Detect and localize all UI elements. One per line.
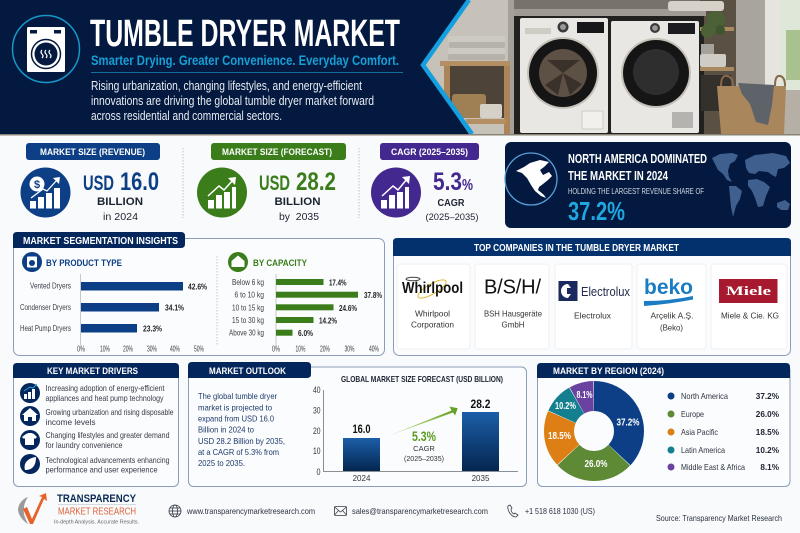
header description: innovations are driving the global tumble dryer market forward (91, 94, 374, 108)
world map (712, 153, 790, 217)
chart: by product type (20, 252, 208, 354)
panel: top companies: TOP COMPANIES IN THE TUMBLE DRYER MARKET (474, 243, 679, 254)
chart: by capacity: Below 6 kg (232, 278, 264, 287)
panel: market segmentation insights (13, 232, 384, 356)
stat: market size forecast: USD (259, 172, 290, 195)
chart: by capacity: 24.6% (339, 304, 358, 313)
chart: by capacity (228, 252, 383, 354)
stat: CAGR: CAGR (438, 198, 465, 209)
footer: email: sales@transparencymarketresearch.com (352, 506, 488, 516)
stat: CAGR: (2025–2035) (426, 212, 478, 222)
title: TUMBLE DRYER MARKET (90, 13, 400, 55)
legend: regions: 37.2% (756, 392, 780, 401)
company: Whirlpool (397, 264, 470, 349)
company: BSH: B/S/H/ (484, 276, 541, 298)
driver: energy efficiency: appliances and heat pump technology (46, 394, 164, 403)
chart: by capacity: 37.8% (364, 291, 383, 300)
panel: top companies (393, 238, 791, 356)
callout: North America dominated: THE MARKET IN 2024 (568, 168, 669, 183)
panel: market by region (537, 363, 790, 486)
chart: by capacity: 10% (296, 344, 306, 354)
company: Electrolux (555, 264, 632, 349)
stat: market size forecast: BILLION (274, 196, 321, 208)
company: Beko: beko (644, 276, 693, 299)
panel: market segmentation insights: MARKET SEGMENTATION INSIGHTS (23, 236, 178, 247)
company: Miele (711, 264, 787, 349)
legend: regions: 8.1% (760, 463, 780, 472)
outlook text: 2025 to 2035. (198, 458, 245, 468)
chart: by capacity: 40% (369, 344, 379, 354)
chart: by capacity: 14.2% (319, 316, 338, 326)
chart: donut by region: 18.5% (548, 430, 572, 442)
chart: global market size forecast: 5.3% (412, 428, 436, 444)
footer logo: Transparency Market Research (18, 493, 139, 526)
callout: North America dominated (505, 142, 791, 228)
chart: by product type: 50% (194, 344, 204, 354)
chart: by capacity: 17.4% (329, 278, 347, 288)
chart: by capacity: 6 to 10 kg (234, 291, 264, 300)
footer: phone (508, 505, 595, 517)
footer logo: Transparency Market Research: MARKET RESEARCH (58, 506, 136, 518)
company: Miele: Miele & Cie. KG (721, 310, 779, 320)
dryer (611, 21, 699, 133)
header photo: laundry room (420, 0, 800, 134)
legend: regions: 18.5% (756, 428, 780, 437)
chart: by product type: 40% (170, 344, 180, 354)
stat: market size revenue: MARKET SIZE (REVENUE) (40, 147, 145, 158)
company: BSH (475, 264, 549, 349)
icon: North America globe (505, 153, 557, 205)
legend: regions: Europe (681, 410, 704, 419)
legend: regions: Middle East & Africa (681, 463, 745, 472)
stat: CAGR: 5.3 (433, 168, 462, 196)
stat: market size revenue: USD (83, 172, 114, 195)
chart: global market size forecast: GLOBAL MARKET SIZE FORECAST (USD BILLION) (341, 374, 503, 384)
company: Beko (637, 264, 706, 349)
outlook text (198, 391, 285, 468)
chart: global market size forecast: 2035 (472, 474, 490, 483)
icon: revenue growth: $ (34, 179, 40, 191)
chart: global market size forecast: 28.2 (470, 397, 491, 411)
chart: by capacity: Above 30 kg (229, 329, 264, 338)
chart: donut by region: 37.2% (616, 416, 640, 428)
legend: regions (668, 392, 780, 472)
driver: laundry convenience (20, 430, 170, 450)
chart: by product type: 10% (100, 344, 110, 354)
company: Electrolux: Electrolux (574, 310, 612, 320)
stat: CAGR: % (462, 177, 473, 194)
chart: by product type: 20% (123, 344, 133, 354)
chart: global market size forecast: 2024 (353, 474, 371, 483)
outlook text: expand from USD 16.0 (198, 414, 274, 424)
left shelf with towels (440, 36, 510, 134)
stat: market size forecast: MARKET SIZE (FORECAST) (222, 147, 332, 158)
company: Miele: Miele (726, 283, 771, 298)
header description: Rising urbanization, changing lifestyles, and energy-efficient (91, 79, 362, 93)
company: BSH: GmbH (502, 320, 524, 330)
footer: website (169, 505, 315, 517)
company: Electrolux: Electrolux (581, 285, 631, 299)
legend: regions: 26.0% (756, 410, 780, 419)
outlook text: Billion in 2024 to (198, 424, 254, 434)
outlook text: market is projected to (198, 402, 272, 412)
outlook text: USD 28.2 Billion by 2035, (198, 436, 285, 446)
callout: North America dominated: HOLDING THE LARGEST REVENUE SHARE OF (568, 187, 704, 196)
chart: global market size forecast (313, 374, 518, 483)
chart: by product type: Heat Pump Dryers (20, 324, 71, 333)
chart: by product type: Condenser Dryers (20, 303, 71, 312)
footer: phone: +1 518 618 1030 (US) (525, 506, 595, 516)
chart: by capacity: 15 to 30 kg (232, 316, 264, 325)
company: BSH: BSH Hausgeräte (484, 308, 542, 318)
legend: regions: Asia Pacific (681, 428, 718, 437)
panel: key market drivers (13, 363, 179, 486)
driver: urbanization (20, 406, 174, 427)
stat: market size revenue: BILLION (97, 196, 143, 208)
panel: market outlook (188, 362, 526, 486)
footer: website: www.transparencymarketresearch.com (186, 506, 315, 516)
panel: key market drivers: KEY MARKET DRIVERS (47, 366, 138, 377)
chart: by capacity: 0% (272, 344, 280, 354)
chart: global market size forecast: CAGR (413, 444, 435, 453)
driver: technology (20, 454, 170, 474)
panel: market outlook: MARKET OUTLOOK (209, 366, 286, 377)
chart: global market size forecast: 40 (313, 385, 320, 395)
stat: market size revenue: 16.0 (120, 168, 159, 196)
chart: by product type: 34.1% (165, 304, 185, 312)
chart: donut by region: 10.2% (555, 400, 576, 412)
driver: urbanization: income levels (46, 418, 96, 427)
chart: by capacity: 6.0% (298, 329, 314, 338)
driver: technology: Technological advancements enhancing (46, 456, 170, 465)
arrow: growth (388, 406, 458, 436)
header description: across residential and commercial sectors. (91, 109, 282, 123)
company: Beko: (Beko) (660, 322, 683, 332)
callout: North America dominated: 37.2% (568, 196, 625, 226)
chart: by capacity: 20% (320, 344, 330, 354)
company: Whirlpool: Whirlpool (415, 308, 450, 318)
chart: donut by region (548, 389, 640, 470)
chart: global market size forecast: 20 (313, 426, 320, 436)
stat: market size forecast: 28.2 (296, 168, 336, 196)
driver: laundry convenience: Changing lifestyles and greater demand (46, 431, 170, 440)
chart: by capacity: 30% (344, 344, 355, 354)
chart: global market size forecast: 30 (313, 406, 320, 416)
callout: North America dominated: NORTH AMERICA DOMINATED (568, 151, 707, 166)
driver: energy efficiency: Increasing adoption of energy-efficient (46, 384, 165, 393)
driver: energy efficiency (20, 383, 165, 403)
chart: by product type: BY PRODUCT TYPE (46, 258, 122, 269)
icon: forecast growth (197, 168, 247, 218)
legend: regions: North America (681, 392, 728, 401)
stat: market size revenue (20, 143, 160, 223)
chart: by product type: 30% (147, 344, 157, 354)
chart: donut by region: 8.1% (576, 389, 593, 401)
chart: by capacity: 10 to 15 kg (232, 303, 264, 312)
chart: by product type: Vented Dryers (30, 282, 71, 290)
legend: regions: 10.2% (756, 446, 780, 455)
driver: technology: performance and user experience (46, 466, 158, 474)
footer logo: Transparency Market Research: In-depth Analysis. Accurate Results. (54, 520, 139, 526)
header description (91, 79, 374, 123)
icon: CAGR growth (371, 168, 421, 218)
washing machine (520, 18, 608, 133)
driver: urbanization: Growing urbanization and rising disposable (46, 408, 174, 417)
chart: by product type: 0% (77, 344, 85, 354)
legend: regions: Latin America (681, 446, 725, 455)
chart: by product type: 23.3% (143, 324, 163, 334)
company: Whirlpool: Corporation (411, 320, 454, 330)
chart: global market size forecast: 0 (316, 467, 320, 477)
chart: by capacity: BY CAPACITY (253, 258, 308, 269)
outlook text: at a CAGR of 5.3% from (198, 447, 279, 457)
subtitle: Smarter Drying. Greater Convenience. Everyday Comfort. (91, 52, 399, 68)
footer logo: Transparency Market Research: TRANSPARENCY (57, 493, 137, 505)
header navy banner (0, 0, 472, 134)
outlook text: The global tumble dryer (198, 391, 277, 401)
chart: donut by region: 26.0% (584, 458, 608, 470)
icon: dryer machine in ring (12, 16, 80, 82)
company: Beko: Arçelik A.Ş. (650, 310, 694, 320)
company: Whirlpool: Whirlpool (402, 280, 463, 297)
chart: by product type: 42.6% (188, 282, 208, 292)
right shelves, plant and basket (668, 1, 786, 134)
stat: CAGR (371, 143, 479, 222)
chart: global market size forecast: 10 (313, 446, 320, 456)
stat: market size forecast: by 2035 (279, 212, 319, 223)
chart: global market size forecast: (2025–2035) (404, 454, 444, 463)
chart: global market size forecast: 16.0 (352, 422, 371, 436)
driver: laundry convenience: for laundry convenience (46, 441, 123, 450)
panel: market by region: MARKET BY REGION (2024) (553, 366, 664, 377)
stat: market size revenue: in 2024 (103, 212, 138, 223)
stat: CAGR: CAGR (2025–2035) (391, 147, 468, 158)
stat: market size forecast (197, 143, 346, 223)
